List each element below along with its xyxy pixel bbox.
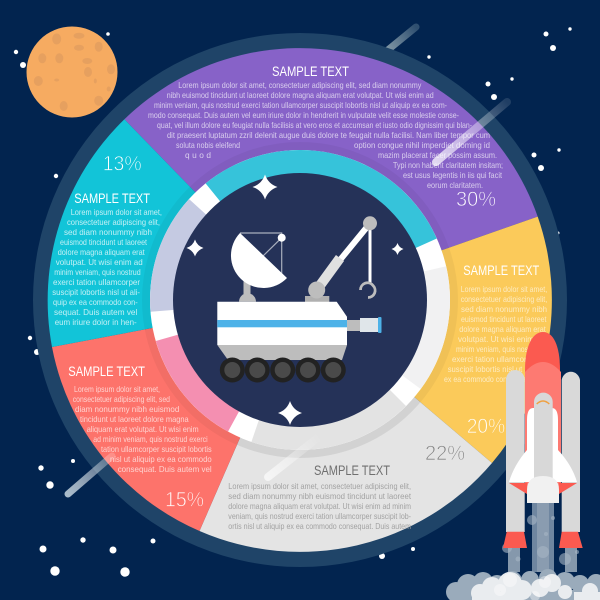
- text block: coral: tation ullamcorper suscipit lobortis: [101, 444, 212, 454]
- text block: yellow: suscipit lobortis nisl ut ali-: [448, 364, 535, 374]
- percent: 22%: 22%: [425, 441, 465, 465]
- text block: purple: mazim placerat facer possim assum.: [378, 150, 497, 160]
- text block: purple: est usus legentis in iis qui facit: [403, 170, 503, 180]
- text block: yellow: volutpat. Ut wisi enim ad: [458, 334, 545, 344]
- heading: yellow: SAMPLE TEXT: [463, 262, 540, 278]
- icon: lunar rover: [217, 216, 382, 382]
- cannon: [347, 317, 382, 333]
- heading: purple: SAMPLE TEXT: [272, 63, 349, 79]
- text block: coral: consectetuer adipiscing elit, sed: [73, 394, 170, 404]
- text block: coral: nisl ut aliquip ex ea commodo: [110, 454, 212, 464]
- heading: teal: SAMPLE TEXT: [74, 190, 150, 206]
- text block: teal: sed diam nonummy nibh: [64, 227, 152, 237]
- text block: purple: Lorem ipsum dolor sit amet, consectetuer adipiscing elit, sed diam nonummy: [178, 80, 422, 90]
- wheels: [220, 358, 346, 382]
- text block: teal: eum iriure dolor in hen-: [55, 317, 137, 327]
- text block: yellow: dolore magna aliquam erat: [459, 324, 546, 334]
- orange fuel tank: [525, 332, 561, 490]
- text block: yellow: minim veniam, quis nostrud: [456, 344, 540, 354]
- text block: coral: tincidunt ut laoreet dolore magna: [80, 414, 189, 424]
- text block: purple: minim veniam, quis nostrud exerci tation ullamcorper suscipit lobortis nisl ut aliquip ex ea com-: [154, 100, 447, 110]
- text block: yellow: ex ea commodo consequat.: [444, 374, 530, 384]
- text block: purple: dit praesent luptatum zzril delenit augue duis dolore te feugait nulla facilisi. Nam liber tempor cum: [167, 130, 490, 140]
- text block: coral: diam nonummy nibh euismod: [75, 404, 180, 414]
- text block: teal: sequat. Duis autem vel: [54, 307, 137, 317]
- orbiter: [509, 393, 577, 503]
- text block: grey: [228, 481, 412, 531]
- text block: coral: [73, 384, 212, 474]
- text block: coral: Lorem ipsum dolor sit amet,: [74, 384, 160, 394]
- text block: purple: quat, vel illum dolore eu feugiat nulla facilisis at vero eros et accumsan et iusto odio dignissim qui blan-: [157, 120, 472, 130]
- icon: space shuttle: [446, 332, 600, 600]
- text block: teal: quip ex ea commodo con-: [53, 297, 138, 307]
- text block: purple: modo consequat. Duis autem vel eum iriure dolor in hendrerit in vulputate velit esse molestie conse-: [148, 110, 459, 120]
- text block: teal: [52, 207, 162, 327]
- panel: grey 22%: [200, 300, 492, 552]
- text block: teal: exerci tation ullamcorper: [53, 277, 140, 287]
- panel: purple 30%: [124, 48, 538, 300]
- planet: [26, 26, 118, 118]
- text block: yellow: [444, 284, 547, 384]
- percent: 20%: 20%: [467, 414, 505, 438]
- text block: yellow: consectetuer adipiscing elit,: [461, 294, 547, 304]
- robotic arm: [305, 216, 377, 302]
- text block: teal: euismod tincidunt ut laoreet: [60, 237, 148, 247]
- text block: purple: Typi non habent claritatem insitam;: [393, 160, 503, 170]
- percent: 13%: 13%: [103, 152, 142, 176]
- text block: purple: option congue nihil imperdiet doming id: [354, 140, 490, 150]
- text block: yellow: euismod tincidunt ut laoreet: [461, 314, 547, 324]
- text block: purple: [148, 80, 503, 190]
- smoke cloud: [446, 569, 600, 600]
- text block: coral: consequat. Duis autem vel: [118, 464, 212, 474]
- text block: yellow: Lorem ipsum dolor sit amet,: [461, 284, 547, 294]
- outer ring: [33, 33, 567, 567]
- text block: purple: eorum claritatem.: [427, 180, 483, 190]
- shooting star bottom: [268, 436, 320, 477]
- text block: grey: dolore magna aliquam erat volutpat. Ut wisi enim ad minim: [228, 501, 411, 511]
- text block: yellow: exerci tation ullamcorper: [452, 354, 538, 364]
- boosters: [503, 370, 583, 548]
- satellite dish: [231, 233, 287, 302]
- percent: 15%: 15%: [165, 488, 204, 512]
- shooting star top: [372, 27, 416, 63]
- panel: teal 13%: [48, 119, 300, 347]
- text block: yellow: sed diam nonummy nibh: [461, 304, 547, 314]
- text block: purple: quod: [185, 150, 211, 160]
- panel: yellow 20%: [300, 217, 552, 463]
- text block: teal: volutpat. Ut wisi enim ad: [56, 257, 143, 267]
- heading: coral: SAMPLE TEXT: [68, 363, 145, 379]
- text block: teal: suscipit lobortis nisl ut ali-: [52, 287, 140, 297]
- text block: teal: minim veniam, quis nostrud: [54, 267, 141, 277]
- panel: coral 15%: [52, 300, 300, 531]
- text block: coral: aliquam erat volutpat. Ut wisi enim: [87, 424, 199, 434]
- text block: grey: veniam, quis nostrud exerci tation ullamcorper suscipit lob-: [228, 511, 411, 521]
- text block: grey: sed diam nonummy nibh euismod tincidunt ut laoreet: [228, 491, 412, 501]
- heading: grey: SAMPLE TEXT: [314, 462, 390, 478]
- shooting star lower left: [68, 456, 112, 494]
- text block: grey: Lorem ipsum dolor sit amet, consectetuer adipiscing elit,: [228, 481, 411, 491]
- text block: coral: ad minim veniam, quis nostrud exerci: [93, 434, 208, 444]
- text block: teal: Lorem ipsum dolor sit amet,: [71, 207, 162, 217]
- text block: purple: soluta nobis eleifend: [176, 140, 240, 150]
- text block: purple: nibh euismod tincidunt ut laoreet dolore magna aliquam erat volutpat. Ut wisi enim ad: [167, 90, 434, 100]
- icon: sparkles: [186, 174, 404, 425]
- inner segmented ring: [146, 146, 454, 454]
- exhaust: [502, 502, 579, 572]
- text block: grey: ortis nisl ut aliquip ex ea commodo consequat. Duis autem: [228, 521, 411, 531]
- text block: teal: consectetuer adipiscing elit,: [67, 217, 160, 227]
- percent: 30%: 30%: [456, 187, 496, 211]
- rover body: [217, 302, 347, 360]
- shooting star right: [436, 102, 507, 162]
- text block: teal: dolore magna aliquam erat: [58, 247, 145, 257]
